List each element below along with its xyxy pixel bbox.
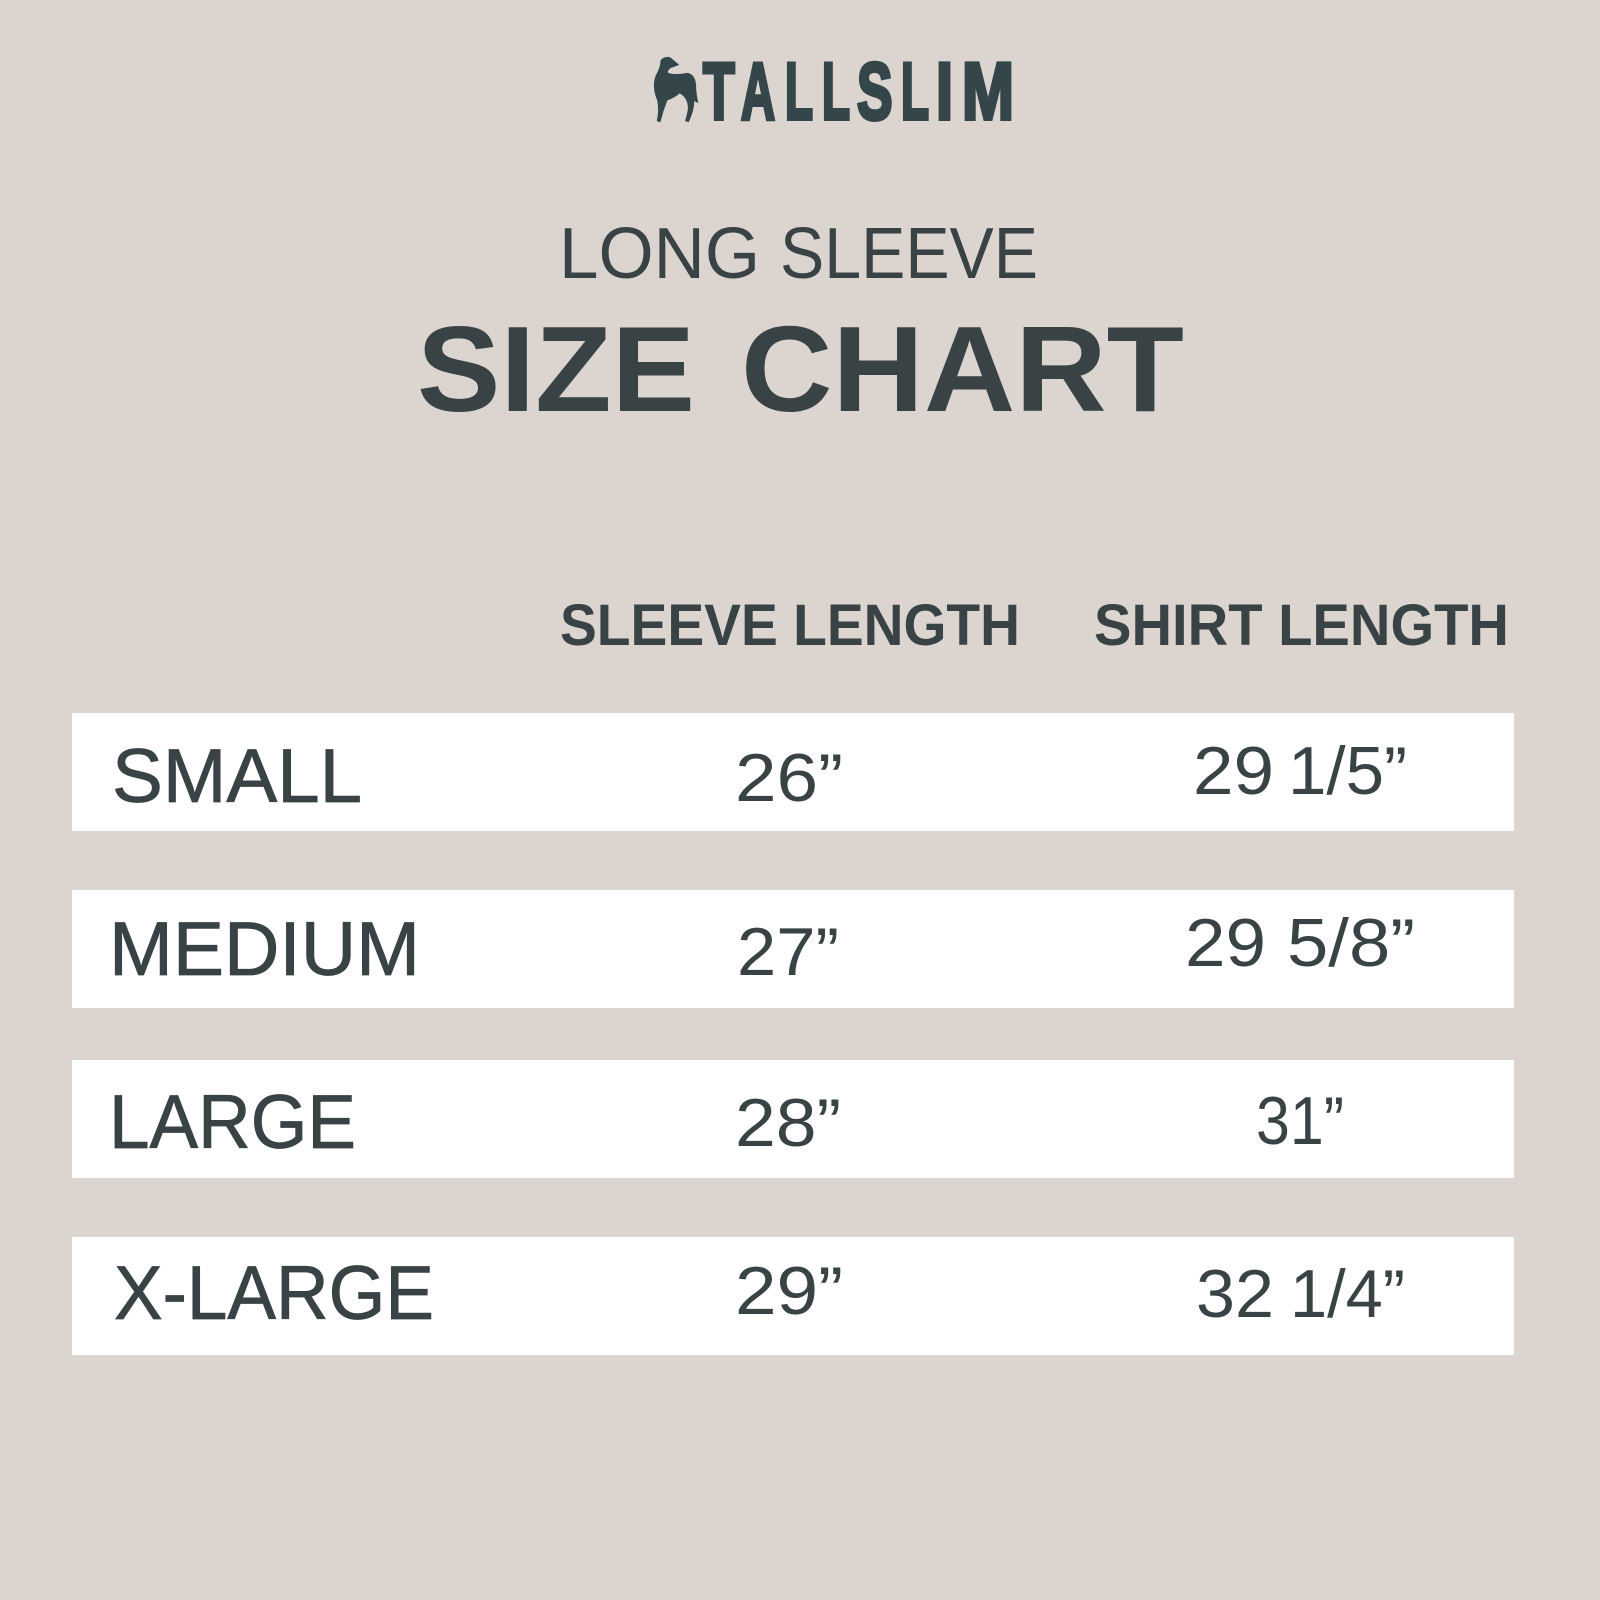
logo wordmark: L (901, 47, 929, 137)
logo wordmark: L (822, 47, 850, 137)
title: size chart: SIZE (417, 301, 695, 437)
shirt length: x-large: 1/4” (1290, 1256, 1405, 1332)
heading: long sleeve: LONG (559, 214, 760, 294)
logo wordmark: S (857, 47, 892, 137)
shirt length: medium: 5/8” (1287, 905, 1415, 981)
row: x-large (72, 1237, 1514, 1355)
column header: shirt length: SHIRT LENGTH (1094, 593, 1509, 658)
logo wordmark: M (962, 47, 1014, 137)
size label: x-large: X-LARGE (114, 1251, 434, 1336)
logo wordmark: L (785, 47, 813, 137)
logo wordmark: A (741, 47, 775, 137)
heading: long sleeve: SLEEVE (780, 214, 1038, 294)
sleeve length: large: 28” (735, 1085, 841, 1161)
logo wordmark: I (936, 47, 953, 137)
shirt length: small: 1/5” (1288, 733, 1407, 809)
shirt length: large: 31” (1256, 1083, 1344, 1159)
column header: sleeve length: SLEEVE LENGTH (560, 593, 1020, 658)
row: medium (72, 890, 1514, 1008)
shirt length: medium: 29 (1185, 905, 1266, 981)
shirt length: small: 29 (1193, 733, 1274, 809)
icon: greyhound dog (654, 57, 698, 122)
sleeve length: x-large: 29” (735, 1253, 843, 1329)
logo wordmark: T (703, 47, 735, 137)
size label: large: LARGE (109, 1080, 356, 1165)
title: size chart: CHART (741, 301, 1184, 437)
row: large (72, 1060, 1514, 1178)
sleeve length: medium: 27” (737, 914, 839, 990)
logo: Tallslim (654, 47, 1014, 137)
row: small (72, 713, 1514, 831)
sleeve length: small: 26” (735, 740, 843, 816)
shirt length: x-large: 32 (1196, 1256, 1274, 1332)
size label: medium: MEDIUM (109, 907, 420, 992)
size label: small: SMALL (112, 734, 362, 819)
